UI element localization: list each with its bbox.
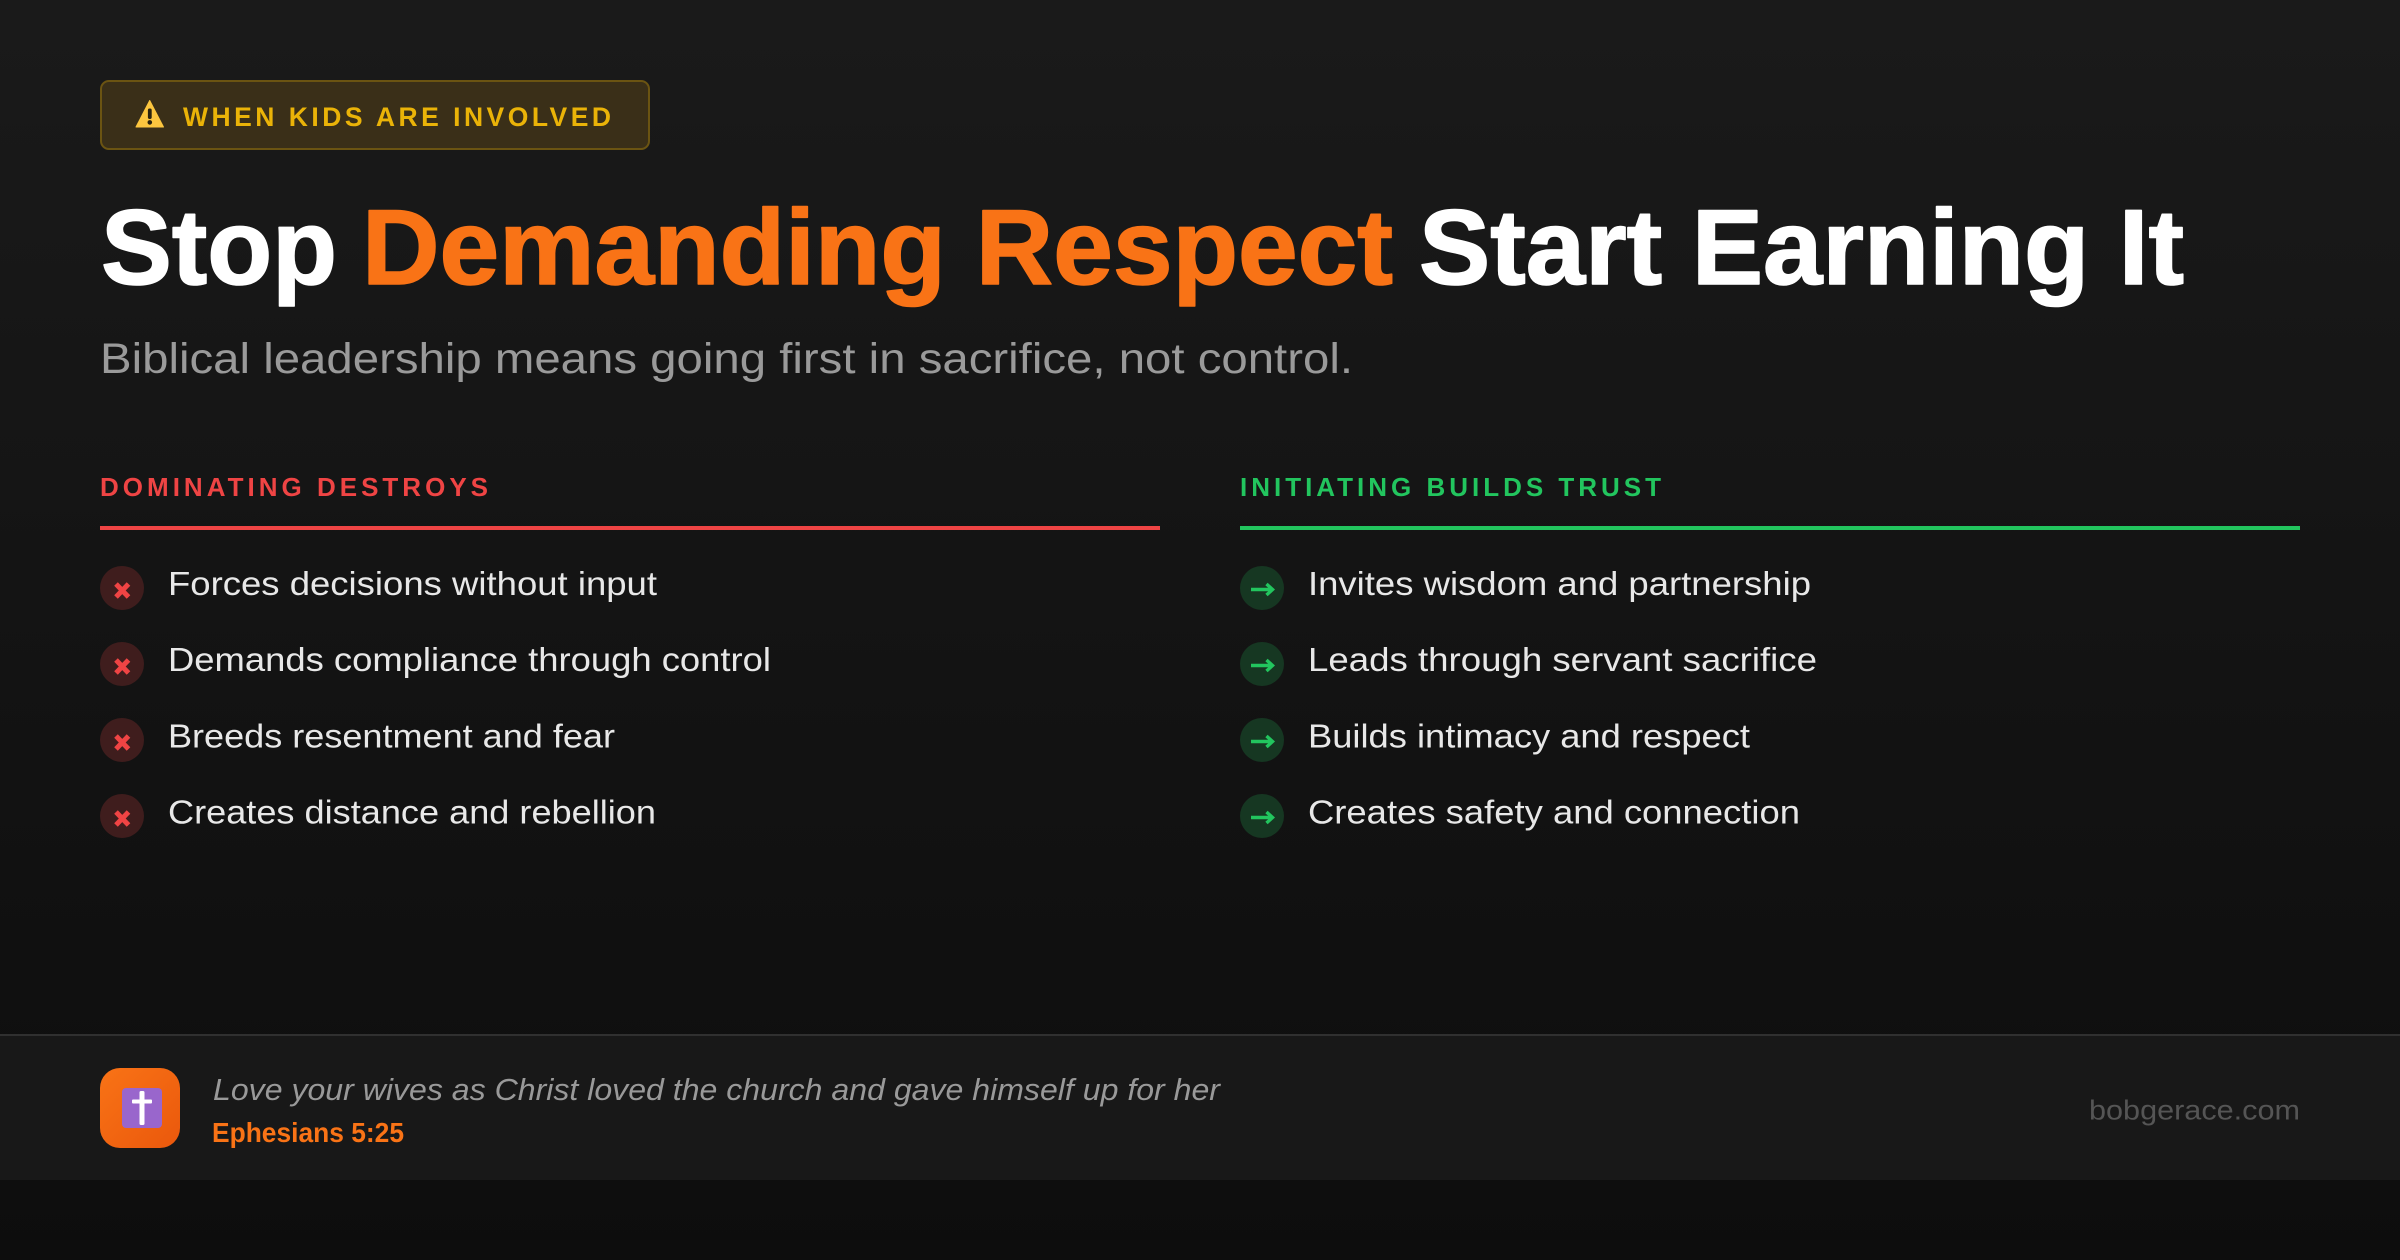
list item: creates safety — [1240, 794, 1800, 838]
list item: creates distance — [100, 794, 656, 838]
subtitle: Biblical leadership means going first in sacrifice, not control. — [100, 335, 1353, 383]
panel: initiating builds trust — [1240, 472, 2300, 838]
list item: leads through — [1240, 641, 1817, 686]
list item: forces decisions — [100, 565, 657, 610]
list item: breeds resentment — [100, 718, 615, 762]
list item: invites wisdom: Invites wisdom and partnership — [1308, 565, 1811, 602]
scripture quote: Love your wives as Christ loved the church and gave himself up for her — [213, 1072, 1222, 1107]
footer band — [0, 1034, 2400, 1180]
list item: demands compliance — [100, 641, 771, 686]
badge: when kids are involved — [101, 81, 649, 149]
badge label: WHEN KIDS ARE INVOLVED — [183, 102, 611, 132]
title — [101, 187, 2184, 307]
list item: forces decisions: Forces decisions without input — [168, 565, 657, 602]
list item: invites wisdom — [1240, 565, 1811, 610]
website: bobgerace.com — [2089, 1094, 2300, 1126]
list item: demands compliance: Demands compliance through control — [168, 641, 771, 678]
icon: cross — [100, 1068, 180, 1148]
icon: warning triangle — [136, 100, 164, 127]
list item: leads through: Leads through servant sacrifice — [1308, 641, 1817, 678]
list item: breeds resentment: Breeds resentment and fear — [168, 718, 615, 754]
list item: builds intimacy — [1240, 718, 1750, 762]
title: Stop — [101, 187, 337, 307]
heading: dominating destroys: DOMINATING DESTROYS — [100, 472, 488, 502]
list item: creates safety: Creates safety and connection — [1308, 794, 1800, 830]
list item: builds intimacy: Builds intimacy and respect — [1308, 718, 1750, 754]
scripture reference: Ephesians 5:25 — [212, 1117, 404, 1148]
list item: creates distance: Creates distance and rebellion — [168, 794, 656, 830]
panel: dominating destroys — [100, 472, 1160, 838]
title: Start Earning It — [1419, 187, 2184, 307]
heading: initiating builds trust: INITIATING BUILDS TRUST — [1240, 472, 1661, 502]
title: Demanding Respect — [362, 187, 1393, 307]
